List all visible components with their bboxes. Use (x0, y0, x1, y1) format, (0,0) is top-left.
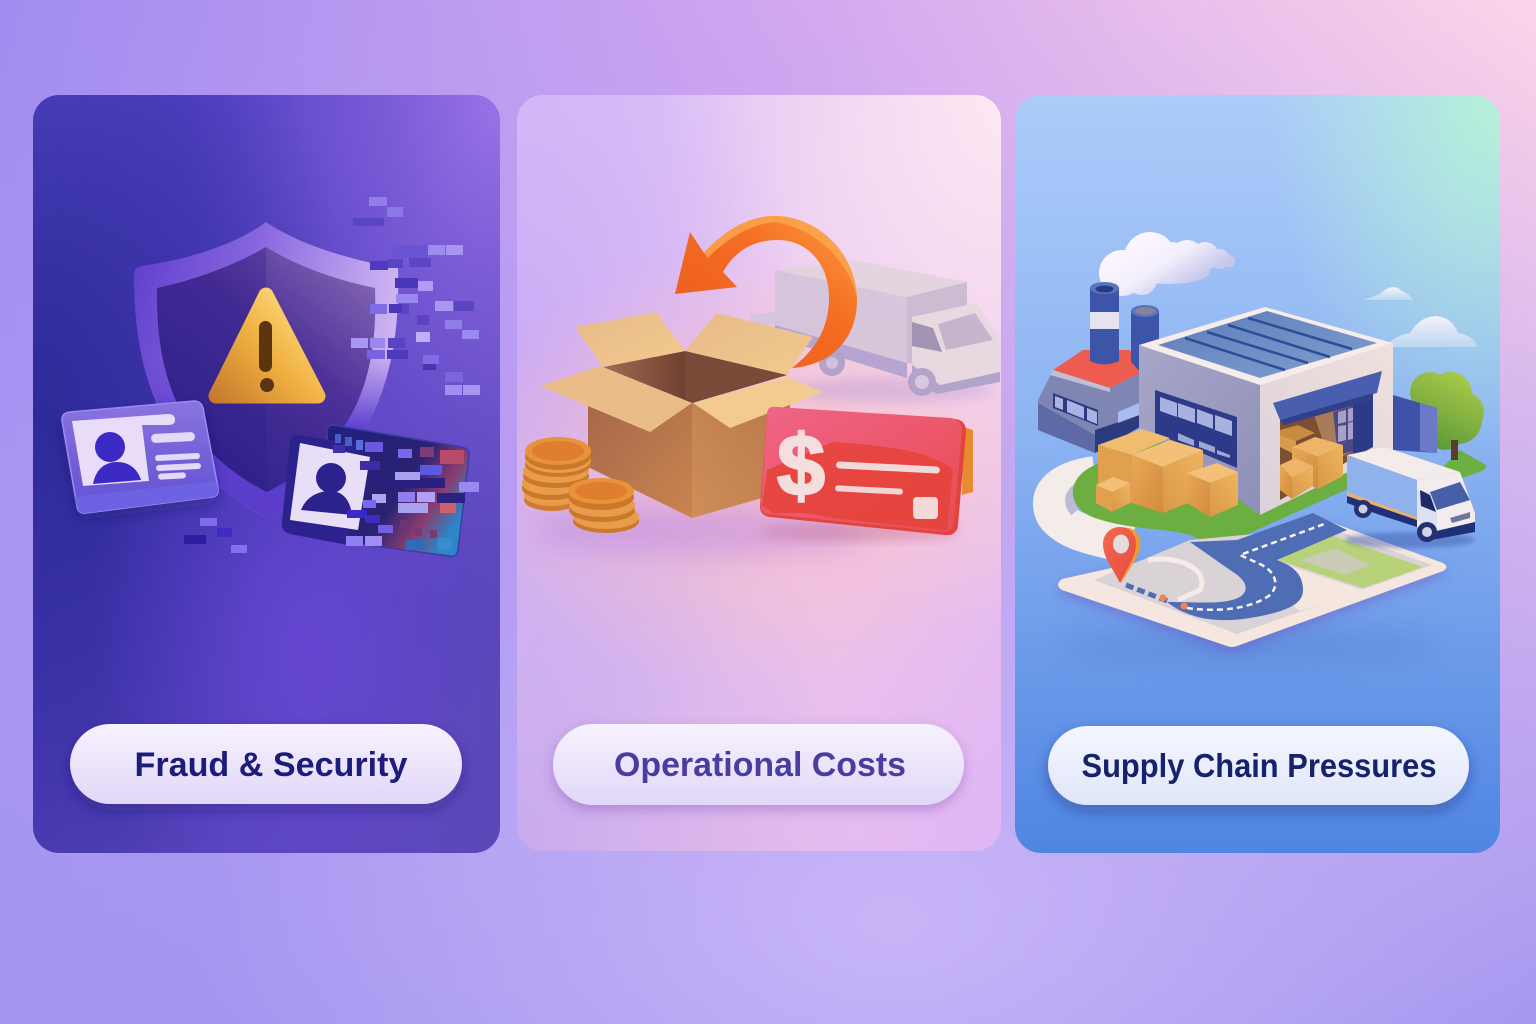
icon: map sheet (1058, 513, 1446, 647)
panel 3 background (1015, 95, 1500, 853)
icon: blue annex and tree (1393, 372, 1484, 460)
blue route (1167, 513, 1347, 620)
label pill: Supply Chain Pressures: Supply Chain Pressures (1082, 747, 1436, 784)
icon: warehouse (1139, 307, 1393, 515)
label pill: Fraud & Security (70, 724, 462, 804)
panel 2 background (517, 95, 1001, 851)
label pill: Supply Chain Pressures (1048, 726, 1469, 805)
dock boxes (1280, 437, 1343, 499)
glitch pixels (184, 197, 480, 553)
label pill: Operational Costs (553, 724, 964, 805)
icon: open cardboard box (540, 312, 823, 518)
panel 1 background (33, 95, 500, 853)
icon: delivery van (1345, 447, 1475, 548)
panel: fraud and security (33, 95, 500, 853)
icon: chimney smoke cloud (1099, 232, 1235, 296)
coin stack left (522, 437, 591, 511)
icon: shield (134, 222, 398, 518)
panel: supply chain pressures (1015, 95, 1500, 853)
chimney short (1131, 305, 1159, 372)
coin stack right (568, 478, 639, 533)
icon: faded delivery truck (750, 260, 1000, 402)
icon: red card with dollar sign (760, 407, 973, 541)
icon: small sky clouds (1363, 287, 1477, 347)
icon: stacked boxes (1096, 429, 1238, 517)
icon: location pin (1103, 527, 1140, 583)
loading dock (1273, 371, 1382, 500)
panel: operational costs (517, 95, 1001, 851)
icon: factory (1038, 282, 1159, 453)
icon: red card with dollar sign: $ (777, 418, 825, 514)
icon: corrupted ID card (282, 425, 469, 556)
chimney tall (1090, 282, 1119, 364)
icon: winding road (1052, 475, 1130, 545)
icon: warning triangle (216, 295, 318, 396)
icon: intact ID card (62, 401, 218, 513)
icon: orange return arrow (675, 216, 857, 368)
label pill: Operational Costs: Operational Costs (614, 746, 906, 784)
warehouse windows (1155, 390, 1237, 468)
icon: coin stacks (522, 437, 639, 533)
icon: green lawn (1073, 425, 1486, 543)
label pill: Fraud & Security: Fraud & Security (134, 746, 408, 784)
